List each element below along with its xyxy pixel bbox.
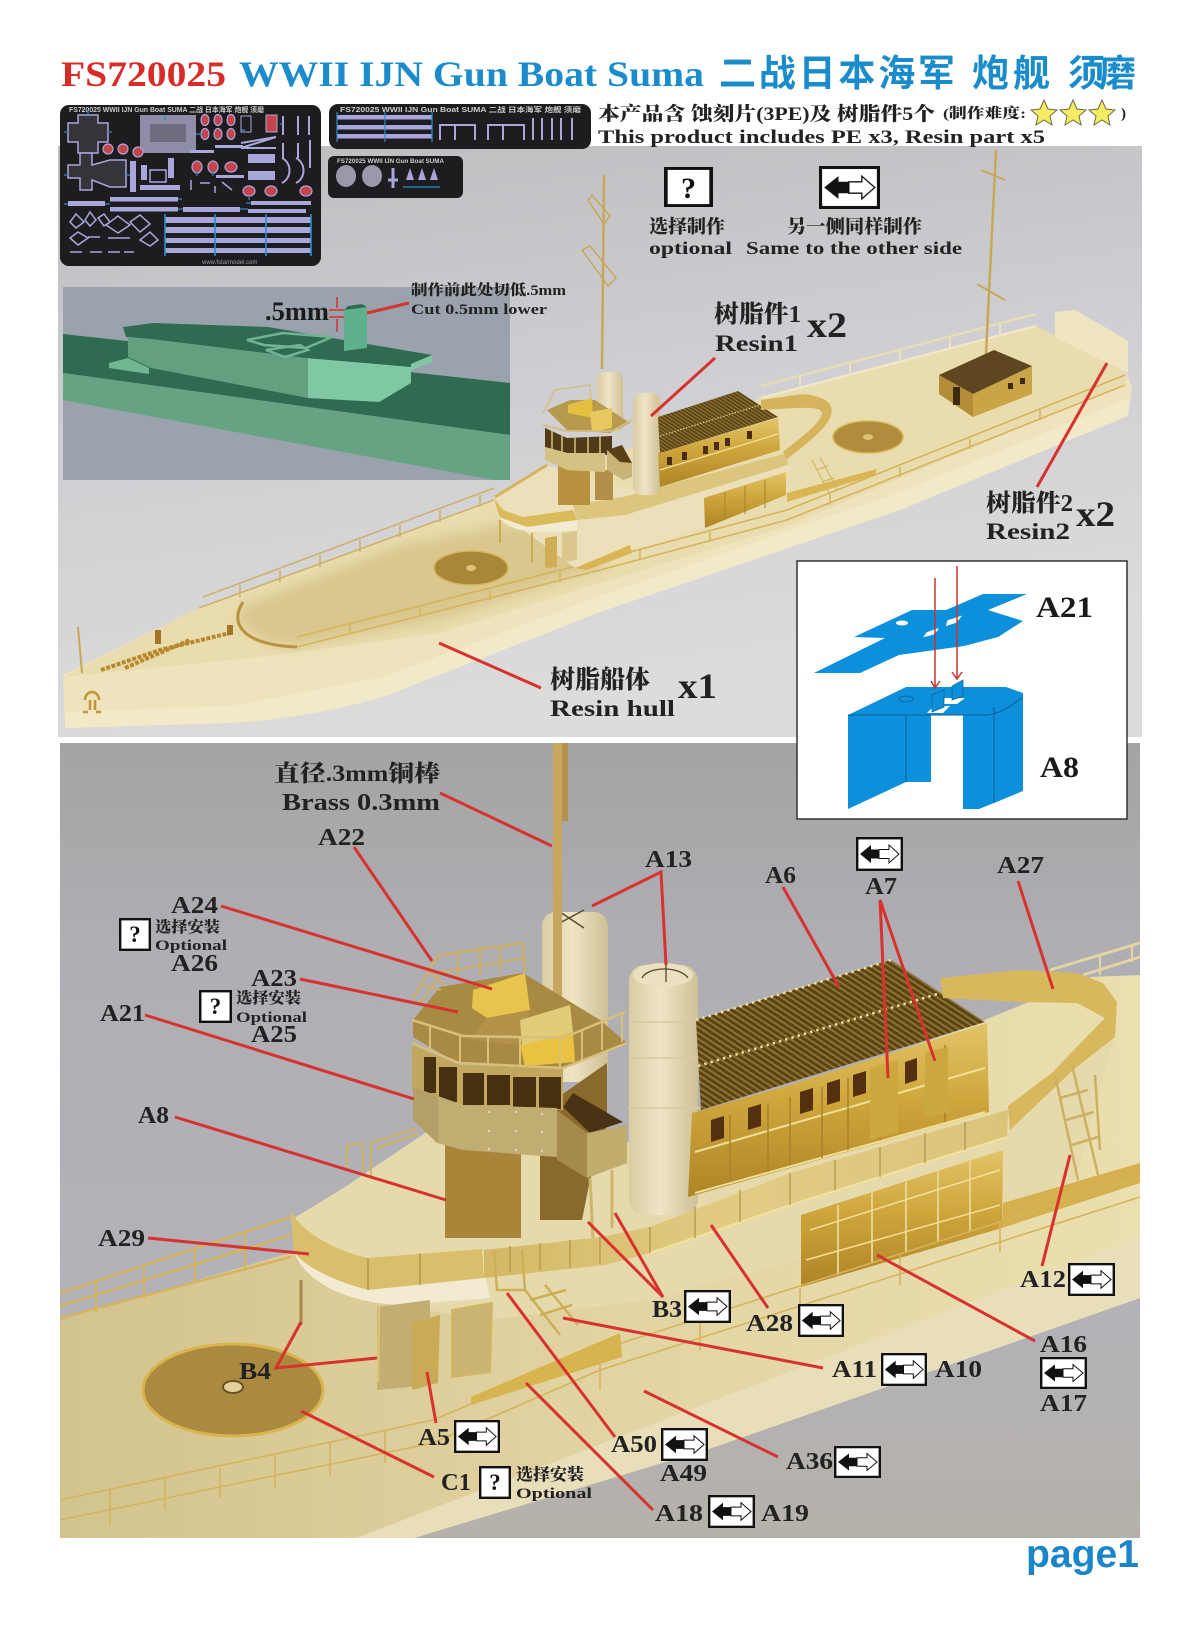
callout: A28 [711,1225,843,1337]
callout: B4 [239,1322,377,1385]
raised deck [495,453,790,568]
callout: A6: A6 [765,863,796,889]
callout: A7 [857,838,935,1078]
legend: optional icon [666,168,711,206]
legend: same side text [746,216,962,258]
legend: optional text: 选择制作 [649,216,725,238]
callout: A36: A36 [786,1449,833,1475]
panel: upper photo of the finished model [58,146,1142,737]
page number: page1 [1026,1533,1139,1576]
funnels [597,372,660,495]
side shield A28 [484,1110,1008,1278]
callout: A50 / A49 [507,1293,707,1487]
label: A8: A8 [1040,751,1079,784]
callout: C1 optional: 选择安装 [516,1464,585,1484]
sheet footer text: www.fstarmodel.com [201,260,257,266]
callout: A24 / A26 optional: 选择安装 [155,917,221,936]
callout: A24 / A26 optional: ? [129,922,141,947]
callout: A13 [592,847,692,965]
callout: B4: B4 [239,1359,271,1385]
callout: resin 2: 树脂件2 [986,490,1073,517]
short rail behind tower [347,1128,417,1178]
title [61,43,1136,97]
photo-etch sheet 3: FS720025 WWII IJN Gun Boat SUMA [337,159,445,165]
callout: resin hull [439,643,717,721]
callout: C1 optional: ? [489,1470,501,1495]
callout: A11 / A10: A10 [935,1357,982,1383]
deck discs [434,421,903,585]
callout: A22 [318,825,432,961]
bridge A21 [412,943,627,1157]
panel: lower close-up photo [60,743,1140,1538]
mast 1 [582,175,616,369]
railings [199,314,1125,647]
stern resin blocks [1055,310,1128,373]
raised deck [291,1037,1115,1320]
tower shadow walls [377,1300,430,1390]
callout: A18 / A19: A18 [655,1501,703,1527]
callout: A12 [1020,1155,1114,1295]
callout: A27 [997,853,1053,989]
callout: resin 2: Resin2 [986,519,1070,544]
callout: brass rod [274,761,552,846]
callout: A12: A12 [1020,1267,1066,1293]
mast: brass rod [553,743,568,1063]
callout: A8: A8 [138,1103,169,1129]
title: FS720025 [61,54,226,94]
hull side band [356,1237,1140,1538]
callout: A23 / A25 optional: 选择安装 [236,988,302,1007]
photo-etch sheet 2: FS720025 WWII IJN Gun Boat SUMA 二战 日本海军 炮舰 须磨 [340,105,581,114]
bridge rear supports [540,1063,607,1220]
funnel 1 [542,910,608,1082]
callout: B3: B3 [652,1297,682,1323]
part A8 [848,680,1023,809]
product contents note: This product includes PE x3, Resin part x5 [598,128,1045,148]
callout: A16 / A17: A16 [1040,1332,1087,1358]
photo-etch sheet 1 [60,105,321,266]
legend: optional icon: ? [681,172,696,205]
callout: A21 [100,1001,414,1099]
legend: same side text: 另一侧同样制作 [787,216,923,238]
callout: A6 [765,863,839,987]
wedge A18 [471,1333,622,1405]
bridge tower A8 [445,1145,521,1238]
sheet parts [64,110,312,256]
hull deck [60,975,1140,1538]
callout: resin hull: Resin hull [550,696,675,721]
sheet parts [337,112,572,142]
deckhouse roof A6 [696,960,985,1110]
callout: resin 2: x2 [1076,494,1115,534]
after shield and side panels [575,394,877,570]
label: A21: A21 [1036,591,1093,624]
shield A29 [291,1207,484,1290]
product contents note [598,100,1126,148]
callout: A7: A7 [865,874,897,900]
title: WWII IJN Gun Boat Suma [239,54,704,94]
callout: A27: A27 [997,853,1044,879]
bridge under-platform [293,1247,490,1305]
label: cut note inset [63,287,510,480]
mast 2 [977,150,1005,354]
side panels A16 [801,1150,1140,1287]
callout: A16 / A17 [877,1255,1087,1417]
callout: A8 [138,1103,446,1200]
callout: A23 / A25 optional: A25 [251,1022,297,1048]
door A5 and frame [301,1280,492,1390]
disc C1 [143,1344,323,1436]
callout: A24 / A26 optional: A24 [171,893,218,919]
side wall strip [573,453,788,520]
callout: A50 / A49: A49 [660,1461,707,1487]
ladder A50 [494,1250,578,1335]
callout: A5 [418,1372,499,1452]
callout: brass rod: Brass 0.3mm [282,790,440,816]
ladder A12 [1055,1065,1100,1180]
callout: A11 / A10: A11 [832,1357,877,1383]
bridge wing box [557,1093,627,1240]
legend: same side text: Same to the other side [746,238,962,258]
callout: resin 1: Resin1 [715,331,798,356]
callout: A29: A29 [98,1226,145,1252]
title: 二战日本海军 [719,43,955,97]
deckhouse [658,391,780,487]
callout: A29 [98,1226,309,1254]
callout: resin 1: x2 [807,305,847,345]
callout: A50 / A49: A50 [611,1432,657,1458]
callout: brass rod: 直径.3mm铜棒 [274,761,440,786]
after deck hut [939,350,1032,417]
left railing [60,1217,291,1318]
bridge tower [495,385,632,568]
callout: resin 1: 树脂件1 [714,301,801,328]
callout: A22: A22 [318,825,365,851]
hull: resin body [63,326,1132,728]
assembly arrows [931,566,962,688]
callout: A24 / A26 optional [120,893,492,989]
callout: B3 [588,1213,730,1323]
photo-etch sheet 2 [329,104,591,149]
deckhouse walls A7 [688,1023,989,1197]
cut note cn: 制作前此处切低.5mm [411,281,566,299]
callout: A24 / A26 optional: Optional [155,938,227,954]
difficulty stars [1031,100,1115,125]
title: 须磨 [1068,43,1136,97]
callout: A36 [644,1391,880,1477]
legend: optional text: optional [649,238,732,258]
callout: A16 / A17: A17 [1040,1391,1087,1417]
callout: C1 optional: Optional [516,1486,592,1502]
legend: optional text [649,216,732,258]
callout: A24 / A26 optional: A26 [171,951,218,977]
part A21 [814,594,1027,673]
callout: A18 / A19: A19 [761,1501,809,1527]
right railing [1050,943,1140,975]
lower railing [60,1177,1140,1525]
callout: A13: A13 [645,847,692,873]
callout: A23 / A25 optional: ? [210,994,221,1019]
callout: resin hull: 树脂船体 [550,666,650,694]
callout: C1 optional [301,1411,592,1502]
callout: A28: A28 [746,1311,793,1337]
panel: A21 + A8 assembly diagram [797,561,1127,819]
cut dimension text: .5mm [265,297,329,326]
callout: resin 2 [986,363,1115,544]
callout: A23 / A25 optional: A23 [251,966,297,992]
photo-etch sheet 3 [328,156,463,198]
callout: A23 / A25 optional [200,966,458,1048]
callout: A23 / A25 optional: Optional [236,1010,307,1026]
shield A27 [940,970,1117,1130]
sheet parts [336,165,440,188]
bow chain and jack staff [78,625,233,712]
cut note en: Cut 0.5mm lower [411,302,547,318]
funnel 2 [628,963,700,1215]
legend: same side icon [821,168,878,207]
leader line: cut height [367,303,409,313]
callout: C1 optional: C1 [441,1470,471,1496]
callout: A11 / A10 [563,1318,982,1385]
photo-etch sheet 1: FS720025 WWII IJN Gun Boat SUMA 二战 日本海军 炮舰 须磨 [69,105,264,114]
product contents note: 本产品含 蚀刻片(3PE)及 树脂件5个 [598,102,935,125]
callout: A18 / A19 [526,1383,809,1527]
product contents note: ) [1121,106,1126,122]
callout: A21: A21 [100,1001,145,1027]
callout: A5: A5 [418,1425,450,1451]
callout: resin 1 [651,301,847,416]
title: 炮舰 [972,43,1050,97]
product contents note: (制作难度: [943,105,1026,122]
callout: resin hull: x1 [678,666,717,706]
